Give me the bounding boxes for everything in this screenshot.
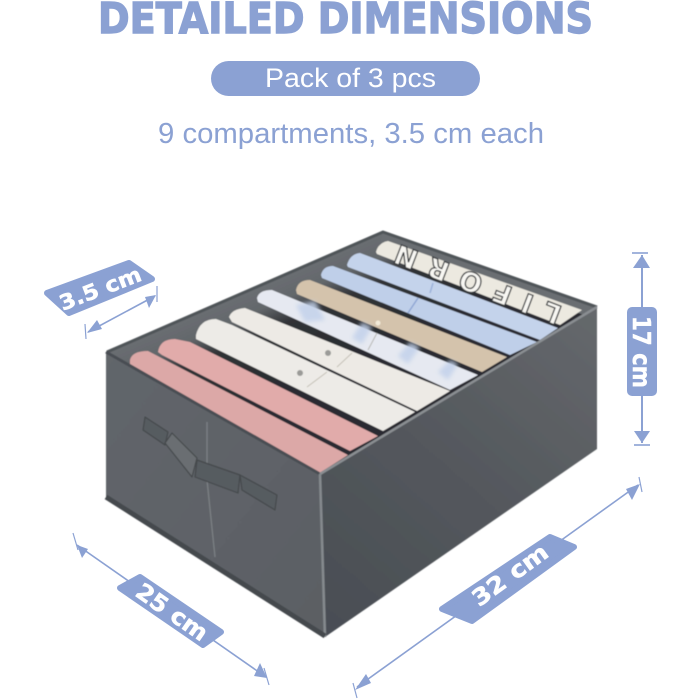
roll: light blue shirt one: [347, 253, 558, 340]
dimension: 32 cm length: 32 cm: [467, 539, 554, 612]
roll: light blue shirt two: [321, 266, 537, 355]
front centre seam: [207, 422, 215, 557]
right panel: [320, 307, 597, 637]
subtitle: 9 compartments, 3.5 cm each: [158, 118, 544, 150]
roll: striped shirt: [257, 290, 478, 390]
roll: white shirt two: [196, 319, 415, 431]
dimension: 32 cm length: [353, 477, 642, 698]
corner seam: [320, 474, 325, 637]
dimension: 17 cm height: 17 cm: [627, 316, 656, 388]
box interior: [107, 232, 597, 475]
right rim: [320, 307, 597, 474]
dimension: 25 cm width: 25 cm: [130, 579, 212, 647]
badge: pack of 3 pcs: [211, 61, 480, 96]
dimension: 17 cm height: [627, 253, 657, 445]
arrow: 3.5 cm: [85, 286, 157, 339]
dimension: 3.5 cm compartment: [47, 262, 157, 339]
roll: white shirt one: [229, 308, 450, 411]
back rim: [107, 232, 597, 352]
printed letters: LIFORN: [390, 238, 566, 330]
back wall strip: [380, 232, 597, 315]
front rim: [106, 352, 320, 474]
roll: beige shirt: [296, 280, 507, 372]
dimension: 25 cm width: [73, 533, 269, 685]
handle: [143, 417, 277, 510]
dimension: 3.5 cm compartment: 3.5 cm: [56, 262, 145, 316]
badge: pack of 3 pcs: Pack of 3 pcs: [265, 63, 436, 93]
roll: pink shirt two: [130, 351, 348, 474]
roll: pink shirt one: [158, 339, 378, 451]
roll: lettered white shirt: [376, 238, 582, 330]
product: storage box with folded clothes: [106, 232, 597, 637]
front panel: [106, 352, 325, 637]
bottom stitching band: [106, 497, 325, 636]
